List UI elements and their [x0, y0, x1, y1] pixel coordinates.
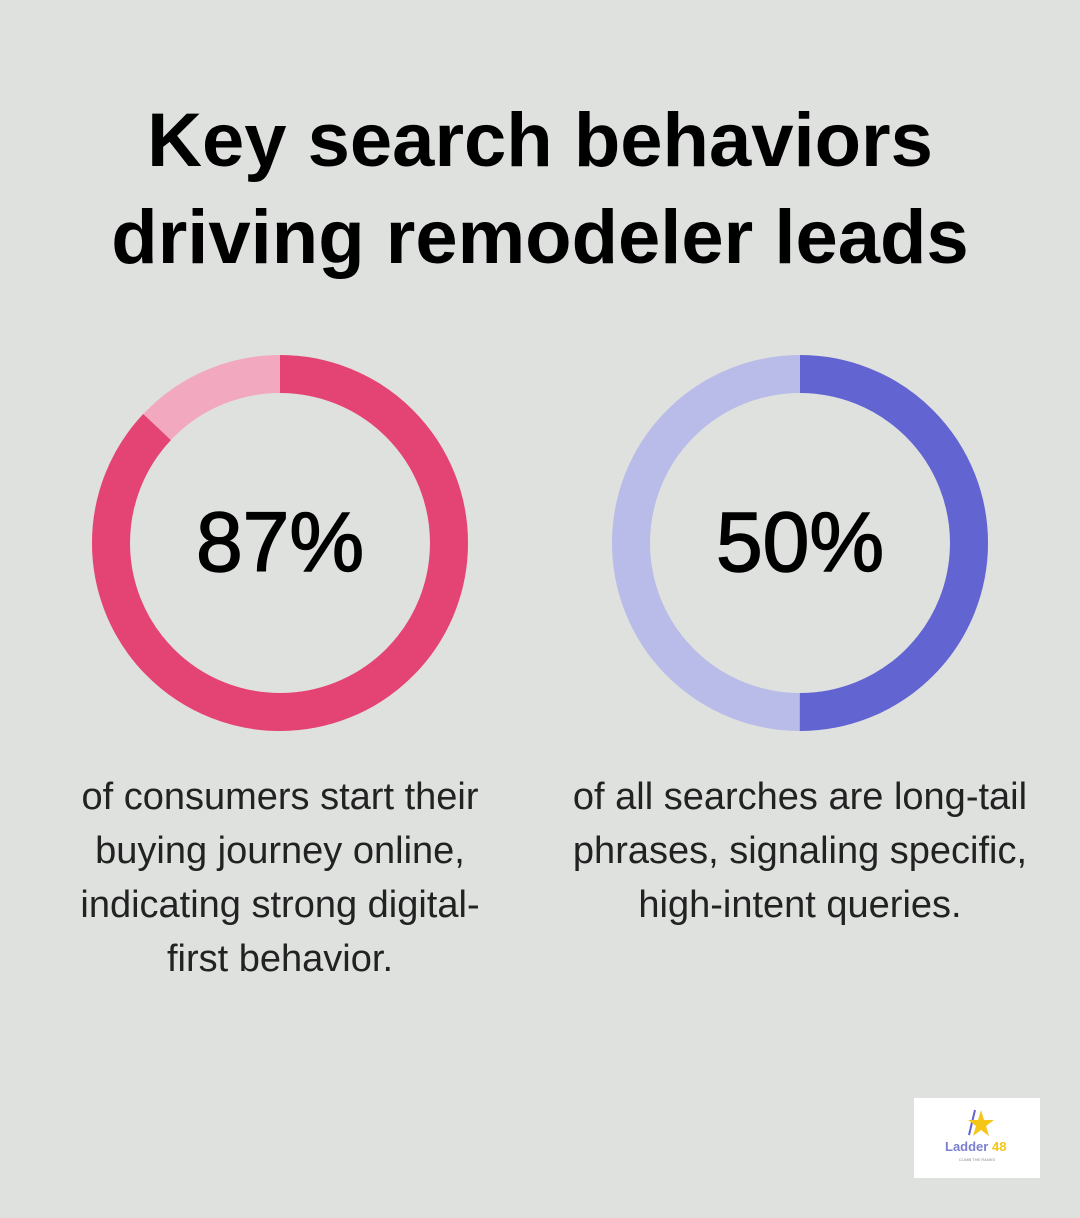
donut chart: 87%: 87%: [196, 495, 364, 589]
donut chart: 50%: 50%: [716, 495, 884, 589]
text: 87% description: buying journey online,: [95, 830, 465, 872]
title: [111, 98, 969, 280]
text: 87% description: indicating strong digital-: [80, 884, 480, 926]
logo: Ladder 48: Ladder 48: [945, 1139, 1006, 1154]
title: driving remodeler leads: [111, 195, 969, 280]
donut chart: 50%: [612, 355, 988, 731]
text: 87% description: of consumers start their: [81, 776, 479, 818]
logo: Ladder 48: CLIMB THE RANKS: [959, 1157, 995, 1162]
text: 50% description: [573, 776, 1027, 926]
text: 50% description: phrases, signaling specific,: [573, 830, 1027, 872]
text: 87% description: first behavior.: [167, 938, 393, 980]
title: Key search behaviors: [147, 98, 933, 183]
text: 50% description: high-intent queries.: [638, 884, 962, 926]
text: 87% description: [80, 776, 480, 980]
logo: Ladder 48: [914, 1098, 1040, 1178]
donut chart: 87%: [92, 355, 468, 731]
text: 50% description: of all searches are long-tail: [573, 776, 1027, 818]
